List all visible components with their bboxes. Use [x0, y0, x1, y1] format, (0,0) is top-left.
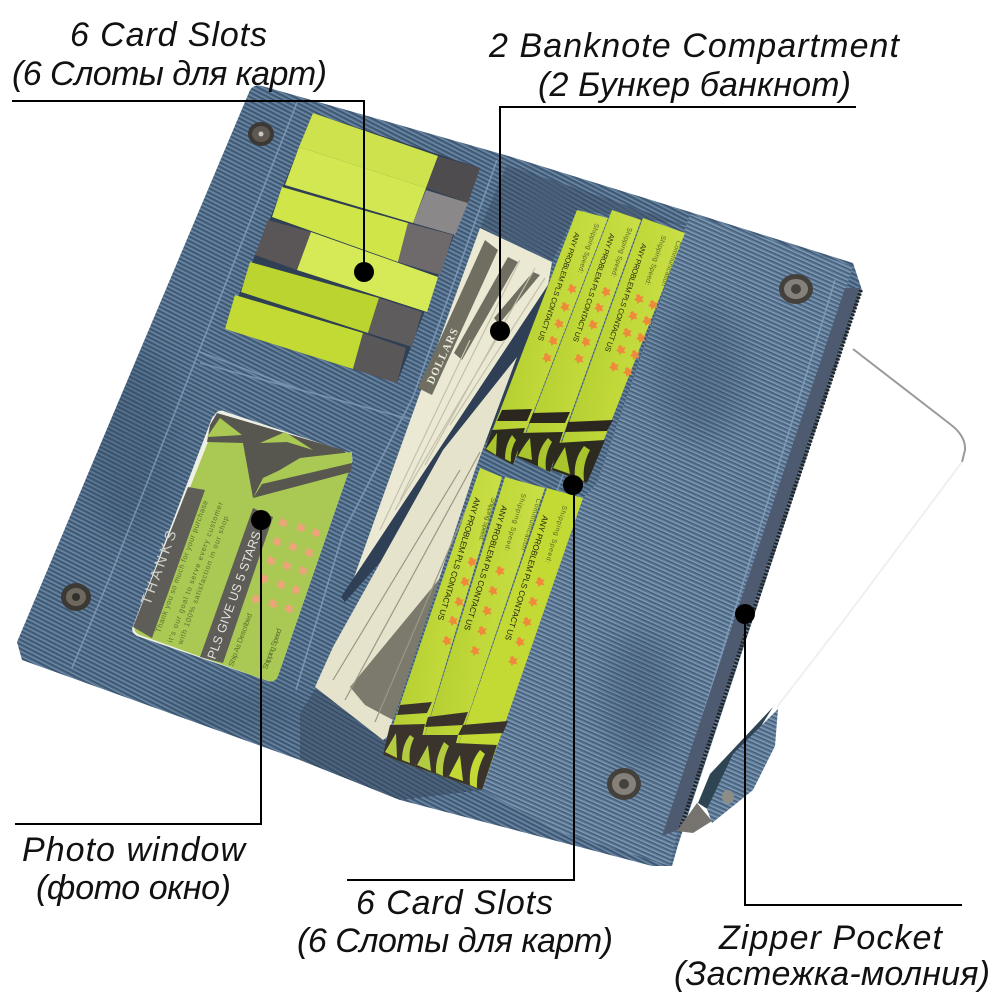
card text: ANY PROBLEM PLS CONTACT US [603, 242, 649, 353]
card text [436, 492, 568, 642]
card 4 [255, 220, 311, 270]
card in window [135, 414, 352, 681]
zipper slider [677, 803, 712, 833]
small note: Shipping Speed [260, 627, 284, 671]
card 1 [299, 113, 438, 188]
dark slit [341, 222, 576, 602]
collar highlights [207, 418, 313, 450]
stars [442, 557, 545, 666]
top centre pocket [480, 165, 685, 262]
back notes [352, 228, 552, 583]
label: photo window: Photo window [22, 831, 247, 869]
right flap [482, 214, 853, 866]
zipper tape [662, 288, 860, 836]
purchase note: Thank you so much for your purchase [153, 499, 210, 634]
label: card slots bottom: (6 Слоты для карт) [297, 922, 613, 960]
collar graphic [207, 413, 352, 498]
front engraving [350, 578, 440, 720]
purchase note: it's our goal to serve every customer [165, 500, 225, 644]
zipper teeth [680, 290, 861, 830]
snap top right [779, 274, 813, 304]
collar wedge [263, 452, 352, 480]
label: zipper pocket: (Застежка-молния) [674, 955, 990, 993]
card C [552, 218, 685, 483]
stars [542, 284, 658, 377]
thanks strip [133, 487, 205, 638]
clear plastic pouch [777, 349, 965, 707]
snap top left [248, 122, 274, 146]
snap buttons [61, 122, 813, 800]
card text: Communication [659, 239, 682, 287]
dollars text: DOLLARS [425, 327, 461, 386]
panel: cards top right [485, 210, 685, 483]
wallet [17, 86, 965, 866]
panel: card slots top [225, 113, 480, 383]
card text: Shipping Speed: [503, 492, 527, 552]
small note: Ship As Described [226, 612, 254, 668]
stitching seams [72, 100, 835, 830]
card 6 [225, 295, 363, 369]
card B [517, 210, 641, 472]
collar stripe [253, 463, 352, 498]
engraved strips [418, 240, 540, 395]
panel: cards bottom [383, 468, 583, 790]
label: card slots bottom [297, 884, 613, 960]
card 5 [241, 262, 379, 333]
note edges [380, 260, 545, 530]
panel: photo window [132, 410, 352, 681]
card text: Shipping Speed: [544, 504, 568, 564]
pls text: PLS GIVE US 5 STARS [205, 529, 264, 661]
zipper [662, 288, 861, 836]
front notes [315, 357, 517, 740]
label: banknote compartment: 2 Banknote Compartment [488, 27, 901, 65]
snap bottom [607, 768, 641, 800]
card backing [225, 113, 480, 383]
leader lines [12, 101, 962, 905]
label: photo window [22, 831, 247, 907]
pls strip [200, 508, 273, 663]
denim blotches [85, 300, 745, 770]
card text: Shipping Speed: [609, 226, 633, 278]
card text: ANY PROBLEM PLS CONTACT US [436, 496, 482, 622]
purchase note: with 100% satisfaction in our shop [175, 515, 230, 647]
card text: ANY PROBLEM PLS CONTACT US [503, 514, 550, 642]
label: card slots top [12, 16, 327, 93]
window rim [132, 410, 352, 681]
card text: ANY PROBLEM PLS CONTACT US [462, 504, 509, 632]
front note edges [333, 452, 480, 722]
label: zipper pocket [674, 919, 990, 993]
snap left [61, 583, 91, 611]
card text: Shipping Speed: [477, 496, 497, 542]
thanks text: THANKS [138, 528, 180, 607]
card 2 [285, 147, 426, 223]
label: photo window: (фото окно) [36, 869, 231, 907]
card text: Shipping Speed: [643, 234, 667, 286]
panel: banknotes [315, 222, 576, 740]
card F [447, 488, 583, 790]
card 3 [272, 187, 408, 262]
card text: Shipping Speed: [576, 222, 600, 274]
label: banknote compartment: (2 Бункер банкнот) [538, 66, 851, 104]
label: card slots top: (6 Слоты для карт) [12, 55, 327, 93]
zipper pull tab [698, 707, 778, 823]
small note [226, 612, 284, 671]
label: card slots top: 6 Card Slots [70, 16, 267, 54]
stars [251, 518, 321, 614]
card D [383, 468, 502, 767]
card text: ANY PROBLEM PLS CONTACT US [571, 232, 617, 343]
card E [415, 477, 545, 778]
label: banknote compartment [488, 27, 901, 104]
card text [536, 222, 682, 353]
leader dots [251, 262, 755, 624]
label: zipper pocket: Zipper Pocket [718, 919, 944, 957]
card text: ANY PROBLEM PLS CONTACT US [536, 231, 582, 342]
label: card slots bottom: 6 Card Slots [356, 884, 553, 922]
card text: Communication [519, 497, 542, 551]
card A [485, 210, 608, 465]
wallet body [17, 86, 862, 866]
bottom centre gusset [300, 688, 482, 800]
